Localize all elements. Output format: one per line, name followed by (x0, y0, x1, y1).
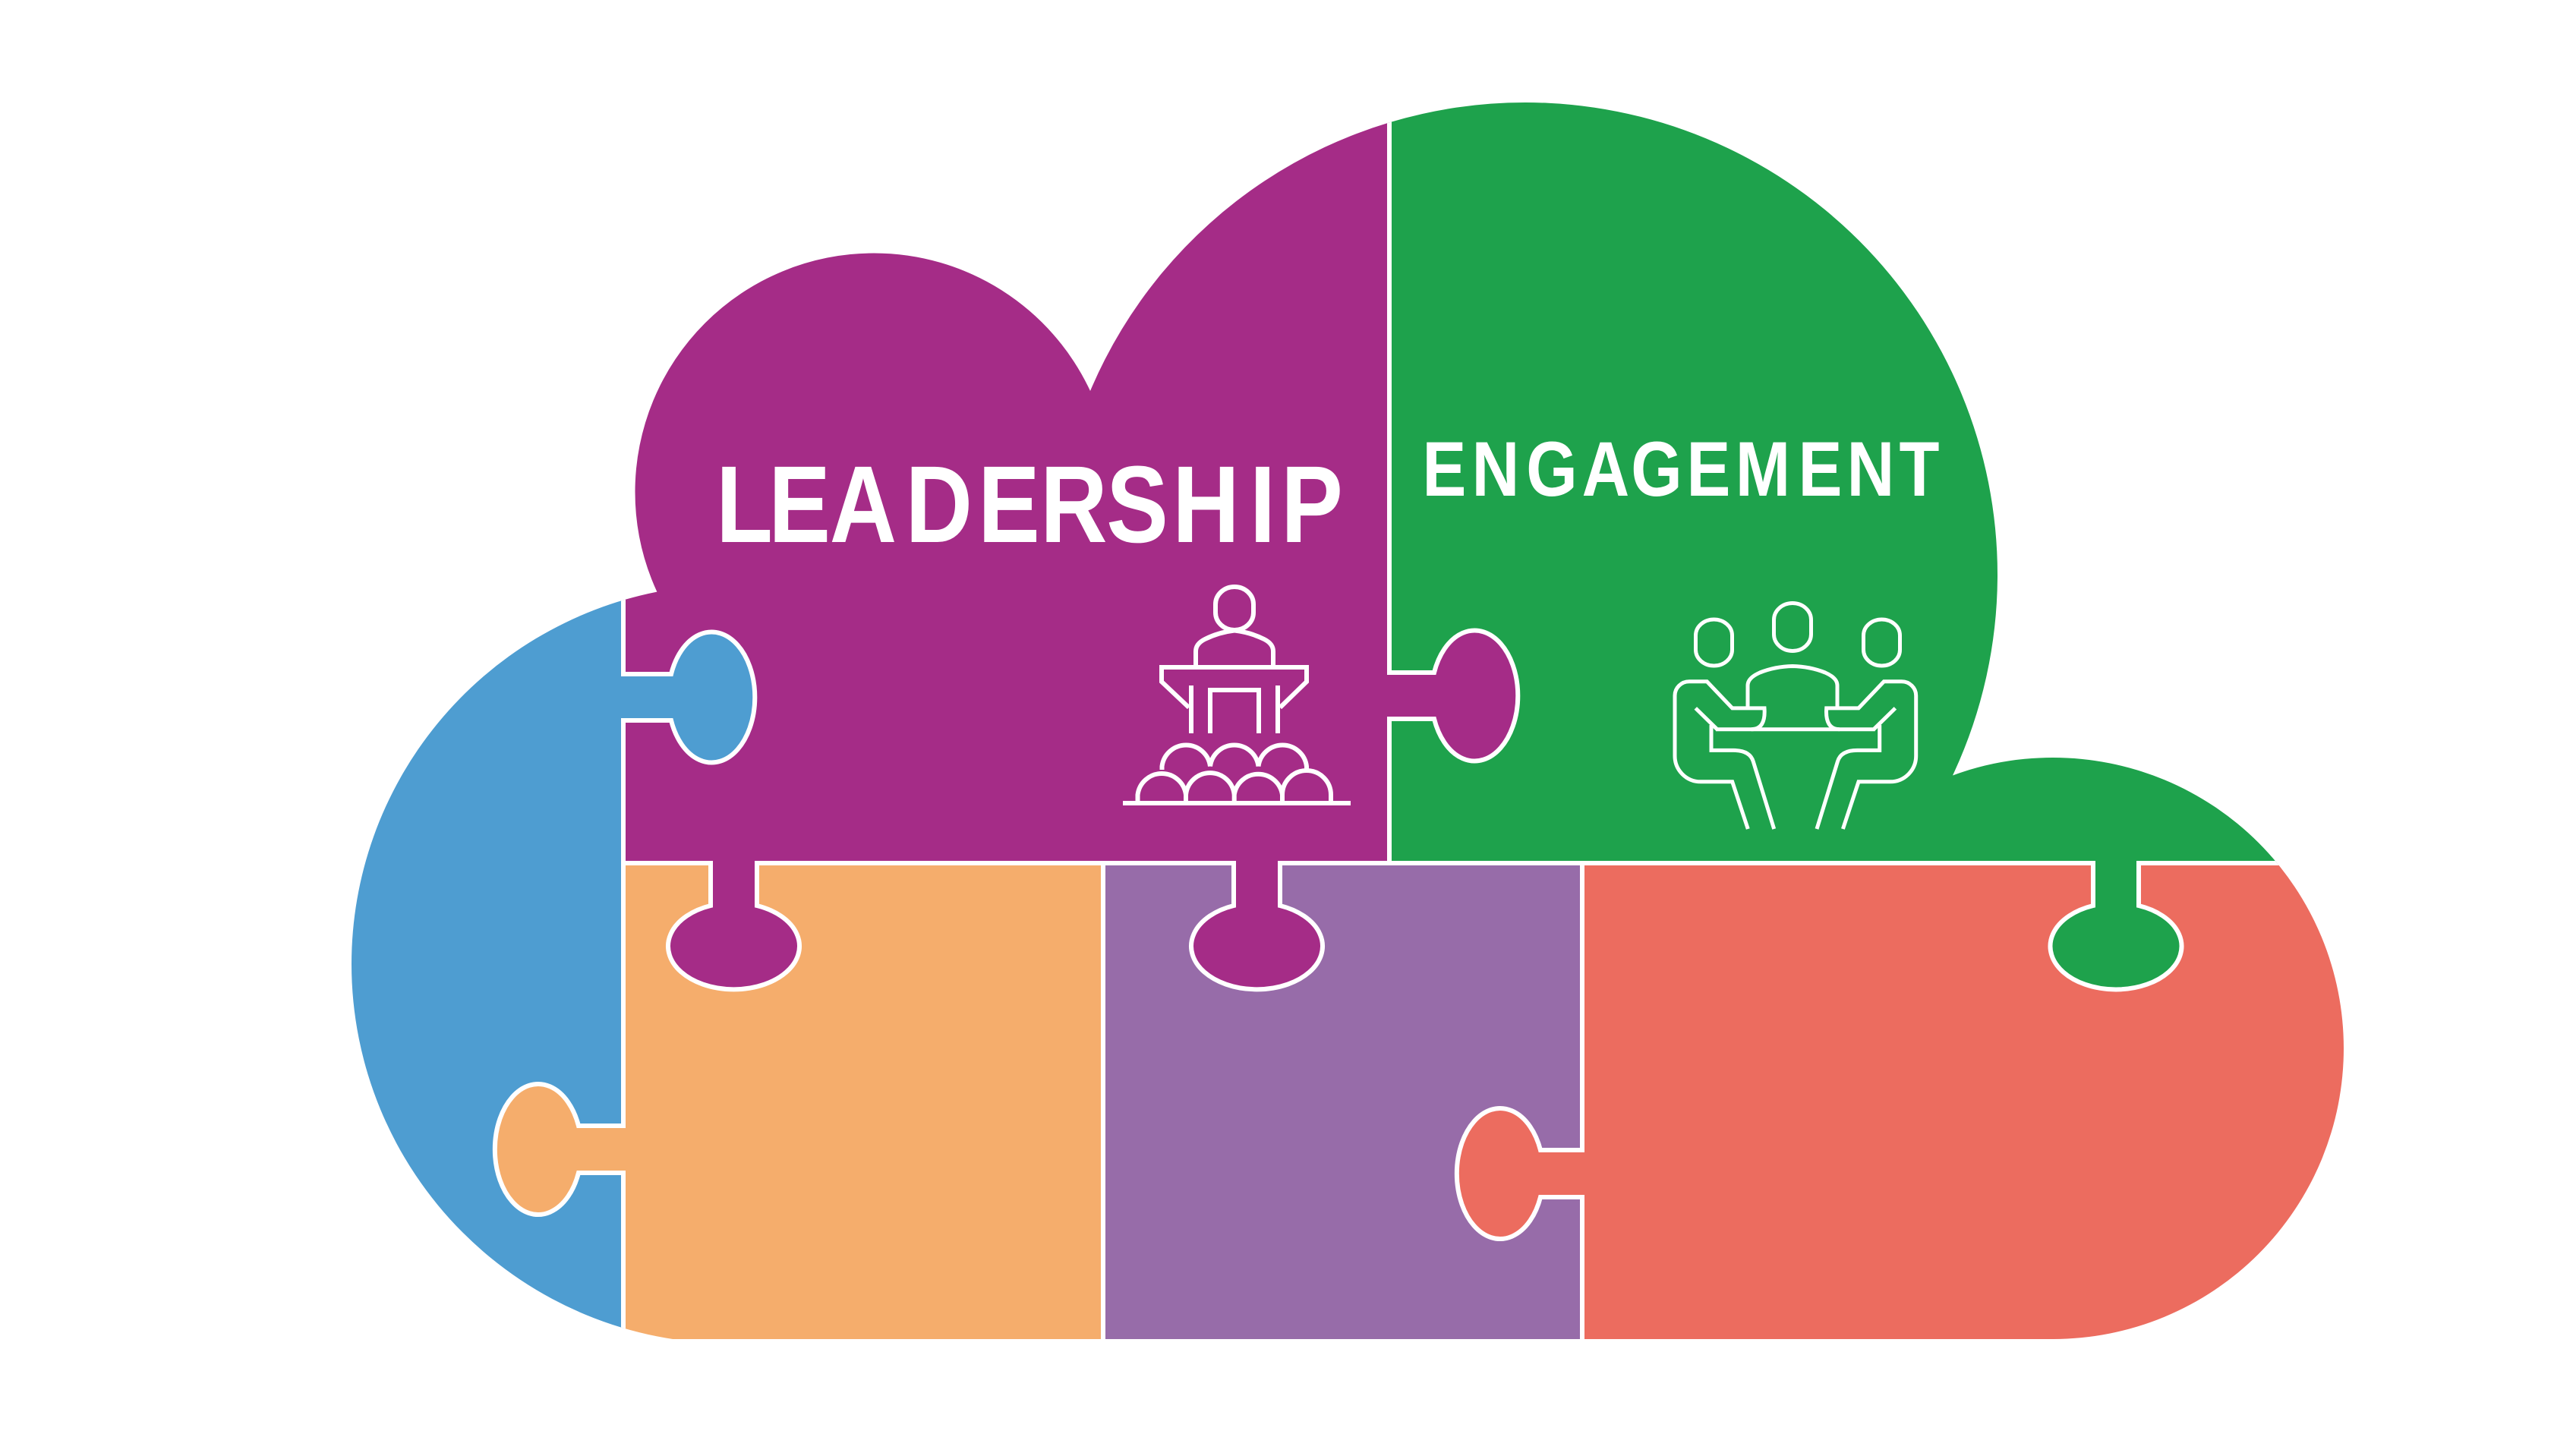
tab: blue into purple (616, 632, 755, 763)
icon: three people meeting at a table (1675, 603, 1916, 829)
icon: speaker at lectern with audience (1123, 587, 1351, 803)
puzzle cloud (304, 76, 2379, 1339)
panel: coral piece (1582, 863, 2379, 1339)
cloud pieces (304, 76, 2379, 1339)
tab: purple into orange (668, 856, 799, 989)
tab: purple into lilac (1191, 856, 1323, 989)
tab: coral into lilac (1457, 1108, 1589, 1239)
heading: engagement: ENGAGEMENT (1423, 426, 1939, 513)
panel: green engagement piece (1389, 102, 2278, 863)
panel: purple leadership piece (623, 76, 1389, 863)
tab: orange into blue (495, 1084, 630, 1215)
panel: orange piece (623, 863, 1103, 1339)
tab: purple into green (1383, 630, 1518, 761)
panel: blue piece (352, 600, 623, 1328)
heading: leadership: LEADERSHIP (716, 444, 1343, 566)
panel: lilac piece (1103, 863, 1582, 1339)
tab: green into coral (2050, 856, 2182, 989)
